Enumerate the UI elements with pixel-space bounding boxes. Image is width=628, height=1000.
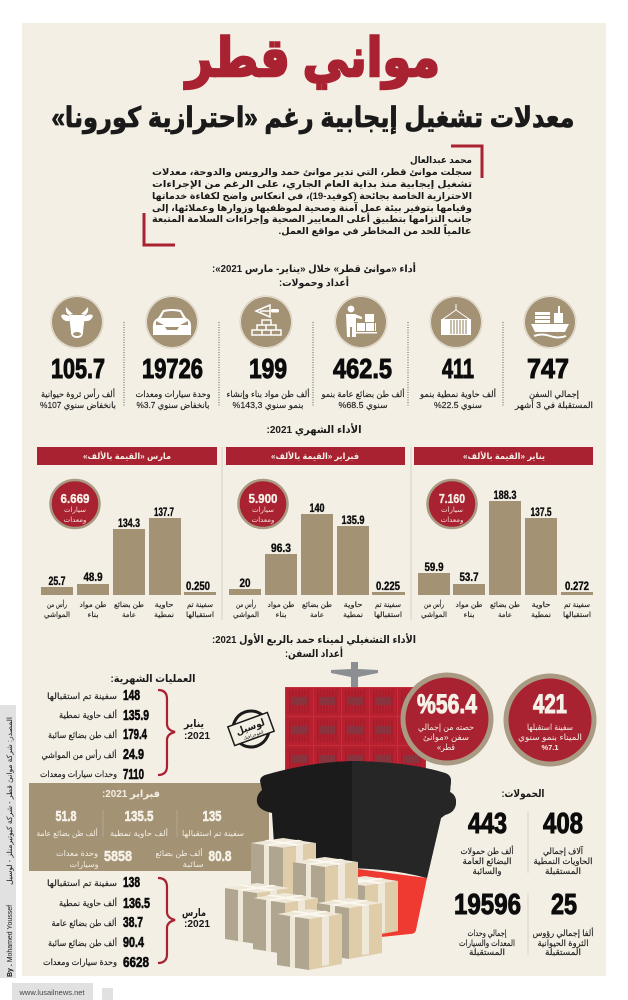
panel: March chart: رأس من bbox=[47, 599, 67, 609]
panel: March operations: مارس bbox=[182, 907, 206, 919]
badge: 421 ships: الميناء بنمو سنوي bbox=[518, 732, 582, 742]
panel: February chart: بناء bbox=[276, 610, 286, 619]
badge: 421 ships: %7.1 bbox=[541, 743, 559, 752]
panel: February chart bbox=[226, 447, 405, 619]
panel: monthly operations heading: العمليات الشهرية: bbox=[110, 673, 196, 685]
panel: January operations: وحدات سيارات ومعدات bbox=[40, 769, 117, 779]
badge: 56.4 percent bbox=[403, 675, 491, 763]
badge: 421 ships: 421 bbox=[533, 689, 567, 719]
panel: February chart: 96.3 bbox=[271, 543, 291, 555]
source strip: المصدر: شركة موانئ قطر - شركة كيوتيرمنلز - لوسيل bbox=[5, 717, 14, 885]
red lower hull bbox=[350, 868, 427, 938]
badge: March cars: ومعدات bbox=[64, 517, 86, 524]
numbers: 462.5 bbox=[333, 353, 392, 384]
panel: cargo totals: المعدات والسيارات bbox=[459, 938, 515, 948]
icon: cow bbox=[51, 296, 103, 348]
numbers: 747 bbox=[527, 353, 569, 384]
section heading: performance: أداء «موانئ قطر» خلال «يناير- مارس 2021»: bbox=[212, 262, 416, 275]
KPI captions: بانخفاض سنوي 3.7% bbox=[136, 400, 210, 410]
panel: January operations: 148 bbox=[123, 688, 140, 704]
KPI captions: المستقبلة في 3 أشهر bbox=[514, 399, 593, 410]
panel: cargo totals bbox=[454, 788, 594, 957]
KPI captions: ألف رأس ثروة حيوانية bbox=[41, 388, 115, 399]
panel: cargo totals: المستقبلة bbox=[469, 947, 505, 957]
panel: cargo totals: ألفا إجمالي رؤوس bbox=[532, 927, 594, 939]
panel: January chart: 59.9 bbox=[424, 562, 444, 574]
body paragraph: جانب التزامها بتطبيق أعلى المعايير الصحية وإجراءات السلامة المتبعة bbox=[152, 212, 472, 225]
panel: cargo totals: الحمولات: bbox=[502, 788, 544, 800]
panel: March operations: 138 bbox=[123, 875, 140, 891]
section heading: Hamad port: الأداء التشغيلي لميناء حمد بالربع الأول 2021: bbox=[212, 633, 416, 646]
panel: March chart: حاوية bbox=[154, 600, 174, 609]
panel: March chart: 48.9 bbox=[84, 572, 102, 584]
section heading: Hamad port bbox=[212, 633, 416, 660]
panel: February chart: نمطية bbox=[343, 610, 363, 619]
panel: cargo totals: البضائع العامة bbox=[462, 856, 512, 866]
panel: March operations: ألف حاوية نمطية bbox=[59, 897, 117, 908]
panel: March chart: المواشي bbox=[44, 610, 70, 619]
panel: January chart: استقبالها bbox=[563, 610, 591, 619]
panel: February band: سفينة تم استقبالها bbox=[182, 829, 244, 838]
panel: March operations: 90.4 bbox=[123, 935, 144, 951]
panel: cargo totals: آلاف إجمالي bbox=[543, 845, 584, 857]
panel: January chart: حاوية bbox=[532, 600, 550, 609]
panel: March operations: وحدة سيارات ومعدات bbox=[43, 957, 117, 967]
KPI row bbox=[40, 296, 593, 410]
panel: January chart: 0.272 bbox=[565, 581, 589, 593]
panel: cargo totals: 408 bbox=[543, 808, 583, 840]
source strip bbox=[0, 705, 16, 978]
containers bbox=[285, 687, 426, 774]
panel: February chart: 140 bbox=[310, 503, 324, 515]
panel: January chart: سفينة تم bbox=[564, 600, 590, 609]
panel: January chart: نمطية bbox=[531, 610, 551, 619]
panel: January chart: المواشي bbox=[421, 610, 447, 619]
illustration: hull and cargo boxes bbox=[225, 761, 456, 970]
panel: March operations: ألف طن بضائع عامة bbox=[52, 917, 116, 928]
panel: March chart: 25.7 bbox=[48, 576, 66, 588]
panel: February chart: رأس من bbox=[236, 599, 256, 609]
panel: February band: 51.8 bbox=[56, 808, 76, 825]
panel: February chart: 0.225 bbox=[376, 581, 401, 593]
source strip: By . Mohamed Youssef bbox=[7, 905, 14, 977]
monthly charts bbox=[37, 447, 593, 620]
icon: container bbox=[430, 296, 482, 348]
panel: January chart: رأس من bbox=[424, 599, 444, 609]
panel: March operations: 136.5 bbox=[123, 896, 150, 912]
icon: worker with boxes bbox=[335, 296, 387, 348]
panel: January chart: يناير «القيمة بالألف» bbox=[463, 451, 545, 462]
body paragraph: عالمياً للحد من المخاطر في مواقع العمل. bbox=[278, 224, 472, 237]
panel: February band: 80.8 bbox=[208, 848, 232, 865]
panel: January operations: 179.4 bbox=[123, 727, 147, 743]
panel: February chart: عامة bbox=[310, 610, 324, 619]
panel: January operations: ألف طن بضائع سائبة bbox=[48, 729, 117, 740]
KPI captions: سنوي 68.5% bbox=[338, 400, 388, 410]
section heading: Hamad port: أعداد السفن: bbox=[285, 646, 343, 660]
panel: February chart: سفينة تم bbox=[375, 600, 401, 609]
KPI captions: وحدة سيارات ومعدات bbox=[136, 389, 210, 399]
panel: March chart: عامة bbox=[122, 610, 136, 619]
panel: January operations: 7110 bbox=[123, 767, 144, 783]
body paragraph: وقيامها بتوفير بيئة عمل آمنة وصحية لموظفيها وزوارها وعملائها، إلى bbox=[152, 201, 472, 214]
panel: February band: 135 bbox=[202, 808, 222, 825]
panel: March chart: مارس «القيمة بالألف» bbox=[83, 451, 171, 462]
panel: March chart: 134.3 bbox=[118, 518, 140, 530]
icon: bricks and trowel bbox=[240, 296, 292, 348]
badge: January cars: ومعدات bbox=[441, 517, 463, 524]
badge: 56.4 percent: حصته من إجمالي bbox=[418, 722, 474, 733]
panel: February band: 5858 bbox=[104, 848, 132, 865]
KPI captions: ألف طن مواد بناء وإنشاء bbox=[226, 388, 310, 400]
panel: February band: سائبة bbox=[182, 860, 204, 869]
panel: February chart: فبراير «القيمة بالألف» bbox=[271, 451, 359, 462]
stamp: Lusail infographic: إنفوجرافيك bbox=[243, 729, 264, 742]
panel: March operations: 38.7 bbox=[123, 915, 143, 931]
panel: March chart: طن بضائع bbox=[114, 600, 144, 609]
panel: January operations: ألف رأس من المواشي bbox=[42, 749, 116, 760]
KPI captions: سنوي 22.5% bbox=[434, 400, 482, 410]
panel: cargo totals: والسائبة bbox=[472, 866, 502, 876]
panel: January chart bbox=[414, 447, 593, 619]
panel: February band bbox=[29, 783, 269, 871]
badge: January cars bbox=[428, 480, 476, 528]
badge: 421 ships: سفينة استقبلها bbox=[527, 722, 573, 732]
panel: January chart: بناء bbox=[464, 610, 474, 619]
panel: February chart: المواشي bbox=[233, 610, 259, 619]
panel: cargo totals: ألف طن حمولات bbox=[460, 845, 514, 856]
badge: March cars: 6.669 bbox=[60, 491, 90, 506]
panel: March chart: طن مواد bbox=[80, 600, 107, 609]
panel: March operations: سفينة تم استقبالها bbox=[47, 878, 117, 889]
numbers: 199 bbox=[249, 353, 287, 384]
panel: cargo totals: 443 bbox=[468, 808, 507, 840]
KPI captions: بنمو سنوي 143,3% bbox=[233, 400, 304, 410]
panel: cargo totals: الحاويات النمطية bbox=[534, 856, 592, 866]
body paragraph bbox=[152, 167, 472, 237]
panel: January chart: 188.3 bbox=[494, 490, 516, 502]
panel: February chart: استقبالها bbox=[374, 610, 402, 619]
footer website: www.lusailnews.net bbox=[19, 988, 85, 997]
panel: March chart bbox=[37, 447, 217, 619]
badge: February cars: سيارات bbox=[252, 507, 274, 514]
panel: March chart: سفينة تم bbox=[187, 600, 213, 609]
panel: January operations: 135.9 bbox=[123, 708, 149, 724]
badge: 56.4 percent: سفن «موانئ bbox=[423, 732, 469, 742]
decorative bracket bottom bbox=[144, 213, 175, 245]
numbers: 411 bbox=[442, 353, 474, 384]
panel: cargo totals: 25 bbox=[551, 889, 577, 921]
numbers bbox=[51, 353, 569, 384]
badge: 56.4 percent: قطر» bbox=[437, 742, 455, 752]
panel: February band: وسيارات bbox=[70, 860, 99, 869]
panel: January chart: طن مواد bbox=[456, 600, 483, 609]
panel: March chart: نمطية bbox=[154, 610, 174, 619]
icon: ship bbox=[524, 296, 576, 348]
badge: March cars: سيارات bbox=[64, 507, 86, 514]
badge: January cars: 7.160 bbox=[439, 491, 465, 506]
panel: January operations: ألف حاوية نمطية bbox=[59, 709, 117, 720]
badge: January cars: سيارات bbox=[441, 507, 463, 514]
section heading: performance bbox=[212, 262, 416, 289]
badge: 56.4 percent: %56.4 bbox=[417, 689, 477, 719]
author: محمد عبدالعال bbox=[410, 155, 472, 166]
panel: March operations: ألف طن بضائع سائبة bbox=[48, 937, 117, 948]
panel: March operations: :2021 bbox=[184, 918, 210, 930]
panel: January chart: 137.5 bbox=[530, 507, 552, 519]
stamp: Lusail infographic: لوسيل bbox=[235, 717, 266, 738]
intro text block bbox=[144, 146, 482, 245]
stamp: Lusail infographic bbox=[225, 705, 277, 753]
panel: February chart: 135.9 bbox=[342, 515, 364, 527]
footer website bbox=[12, 983, 113, 1000]
panel: February band: فبراير 2021: bbox=[102, 789, 160, 800]
badge: February cars: ومعدات bbox=[252, 517, 274, 524]
section heading: monthly: الأداء الشهري 2021: bbox=[266, 423, 362, 436]
panel: March operations: 6628 bbox=[123, 955, 149, 971]
panel: February band: 135.5 bbox=[124, 808, 154, 825]
panel: February band: ألف طن بضائع bbox=[156, 848, 202, 858]
KPI captions bbox=[40, 388, 593, 410]
panel: January operations bbox=[40, 688, 210, 783]
illustration: container ship bbox=[285, 662, 426, 774]
title: مواني قطر bbox=[183, 29, 440, 89]
badge: February cars bbox=[238, 480, 288, 528]
mast bbox=[331, 662, 378, 687]
KPI captions: ألف طن بضائع عامة بنمو bbox=[321, 388, 404, 399]
numbers: 105.7 bbox=[51, 353, 105, 384]
badge: March cars bbox=[50, 480, 100, 528]
panel: cargo totals: المستقبلة bbox=[545, 947, 581, 957]
panel: cargo totals: 19596 bbox=[454, 889, 521, 921]
panel: cargo totals: الثروة الحيوانية bbox=[538, 938, 588, 948]
panel: February chart: حاوية bbox=[344, 600, 362, 609]
body paragraph: الاحترازية الخاصة بجائحة (كوفيد-19)، في انعكاس واضح لكفاءة خدماتها bbox=[152, 191, 472, 202]
body paragraph: تشغيل إيجابية منذ بداية العام الجاري، على الرغم من الإجراءات bbox=[152, 179, 472, 190]
panel: March chart: استقبالها bbox=[186, 610, 214, 619]
panel: February band: ألف حاوية نمطية bbox=[110, 828, 168, 838]
panel: March operations bbox=[43, 875, 210, 971]
black hull bbox=[257, 761, 456, 878]
panel: January chart: 53.7 bbox=[460, 572, 478, 584]
panel: January operations: يناير bbox=[183, 718, 204, 730]
panel: cargo totals: إجمالي وحدات bbox=[468, 928, 506, 939]
panel: February chart: 20 bbox=[240, 578, 250, 590]
panel: January operations: 24.9 bbox=[123, 747, 144, 763]
panel: January operations: سفينة تم استقبالها bbox=[47, 691, 117, 702]
panel: February band: وحدة معدات bbox=[56, 849, 98, 858]
panel: March chart: 137.7 bbox=[154, 507, 174, 519]
panel: February chart: طن مواد bbox=[268, 600, 295, 609]
panel: January operations: :2021 bbox=[184, 730, 210, 742]
KPI captions: ألف حاوية نمطية بنمو bbox=[419, 388, 496, 399]
body paragraph: سجلت موانئ قطر، التي تدير موانئ حمد والرويس والدوحة، معدلات bbox=[152, 167, 472, 178]
KPI captions: إجمالي السفن bbox=[529, 389, 579, 400]
numbers: 19726 bbox=[142, 353, 203, 384]
decorative bracket top bbox=[451, 146, 482, 178]
panel: March chart: 0.250 bbox=[186, 581, 210, 593]
section heading: performance: أعداد وحمولات: bbox=[279, 276, 349, 289]
panel: February chart: طن بضائع bbox=[302, 600, 332, 609]
panel: February band: ألف طن بضائع عامة bbox=[36, 828, 98, 838]
panel: cargo totals: المستقبلة bbox=[545, 866, 581, 876]
panel: March chart: بناء bbox=[88, 610, 98, 619]
badge: February cars: 5.900 bbox=[248, 491, 278, 506]
panel: January chart: طن بضائع bbox=[490, 600, 520, 609]
KPI captions: بانخفاض سنوي 107% bbox=[40, 400, 116, 410]
badge: 421 ships bbox=[506, 676, 594, 764]
panel: January chart: عامة bbox=[498, 610, 512, 619]
cargo boxes bbox=[251, 838, 316, 899]
icon: car bbox=[146, 296, 198, 348]
